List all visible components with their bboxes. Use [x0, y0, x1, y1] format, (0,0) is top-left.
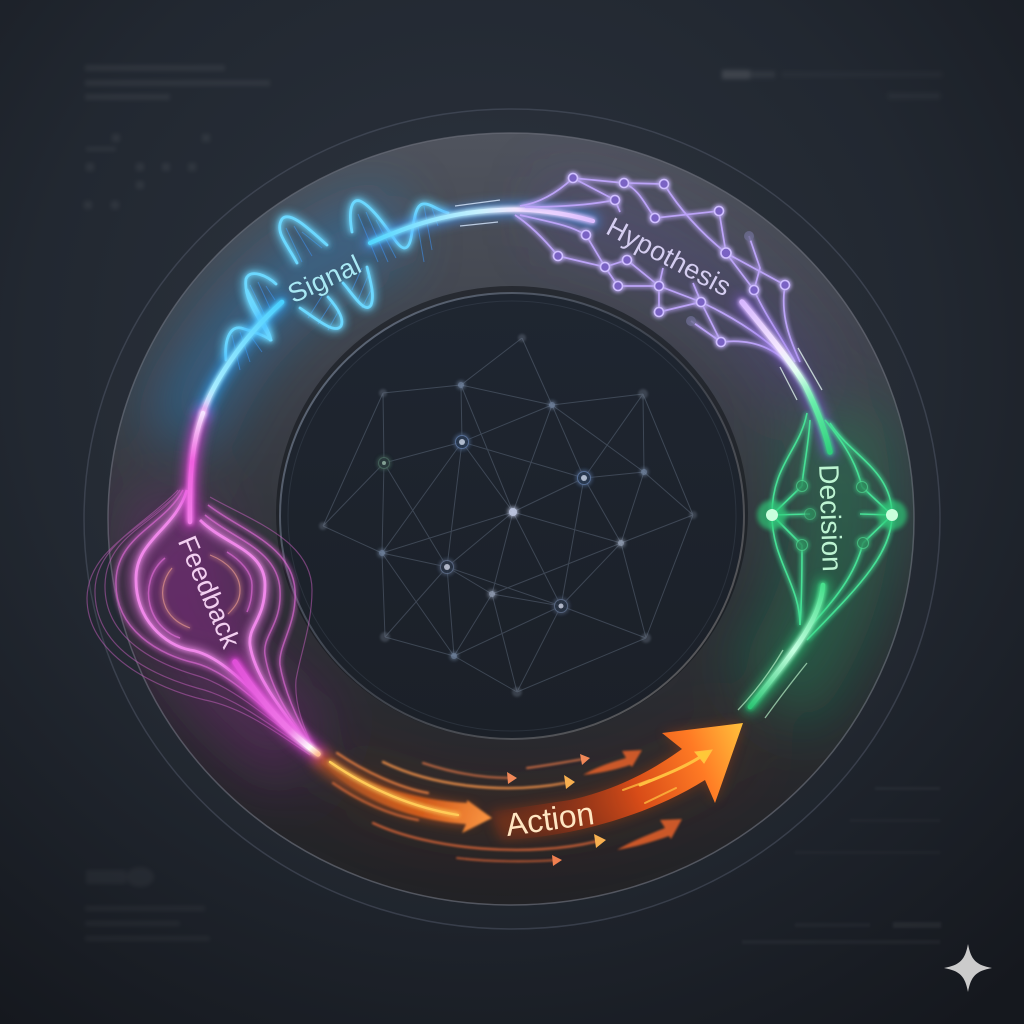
action tail core — [330, 762, 458, 815]
stage: hypothesis — [515, 174, 830, 452]
feedback inner contours — [163, 555, 240, 628]
hypothesis dim nodes — [686, 231, 754, 326]
decision side streaks — [738, 650, 807, 718]
action big arrow glow — [490, 723, 743, 840]
blurred corner annotations: top left — [84, 65, 270, 209]
blurred corner annotations: top right — [722, 70, 942, 99]
action tail glow — [322, 760, 467, 815]
stage: signal — [203, 200, 593, 413]
hypothesis label: Hypothesis — [602, 212, 736, 302]
stage: action — [322, 723, 743, 866]
translucent ring band — [108, 133, 914, 905]
action tail arrow — [322, 756, 492, 833]
signal wave curves — [226, 201, 448, 360]
decision beam — [750, 585, 823, 707]
ambient colour tints — [173, 210, 841, 816]
feedback beam lower — [235, 662, 318, 754]
hypothesis nodes — [554, 174, 790, 346]
action wedge arrows — [583, 750, 682, 850]
hypothesis links — [515, 178, 800, 370]
action big arrow — [490, 723, 743, 840]
network links — [323, 338, 693, 692]
signal beam upper — [370, 210, 593, 243]
action label: Action — [503, 795, 596, 843]
network nodes small — [379, 382, 647, 659]
network hub nodes — [378, 436, 590, 612]
decision small nodes — [796, 480, 868, 550]
central network — [319, 334, 697, 697]
central disk — [276, 286, 748, 740]
network nodes dim — [319, 334, 697, 697]
decision hub nodes — [757, 500, 907, 530]
feedback mid contours — [116, 490, 313, 748]
feedback faint contours — [87, 490, 313, 755]
action flow arrows — [333, 753, 598, 861]
action inner arrow streaks — [623, 750, 712, 803]
stage: feedback — [87, 413, 318, 755]
signal side streaks — [455, 200, 500, 226]
decision curves — [772, 413, 892, 640]
feedback label: Feedback — [172, 532, 246, 653]
blurred corner annotations: bottom right — [742, 787, 941, 944]
feedback lobe tint — [132, 500, 268, 661]
feedback beam upper — [190, 413, 203, 522]
stage: decision — [738, 413, 907, 718]
hypothesis beam — [742, 302, 830, 452]
decision label: Decision — [813, 464, 848, 572]
feedback main contours — [136, 490, 310, 748]
action flow arrow heads — [507, 754, 606, 866]
signal beam lower — [203, 302, 282, 413]
icon: sparkle watermark — [944, 944, 992, 992]
outer thin ring — [84, 109, 940, 929]
signal label: Signal — [283, 249, 366, 309]
signal wave hatching — [232, 206, 438, 370]
blurred corner annotations: bottom left — [85, 867, 210, 941]
hypothesis side streaks — [780, 348, 822, 400]
